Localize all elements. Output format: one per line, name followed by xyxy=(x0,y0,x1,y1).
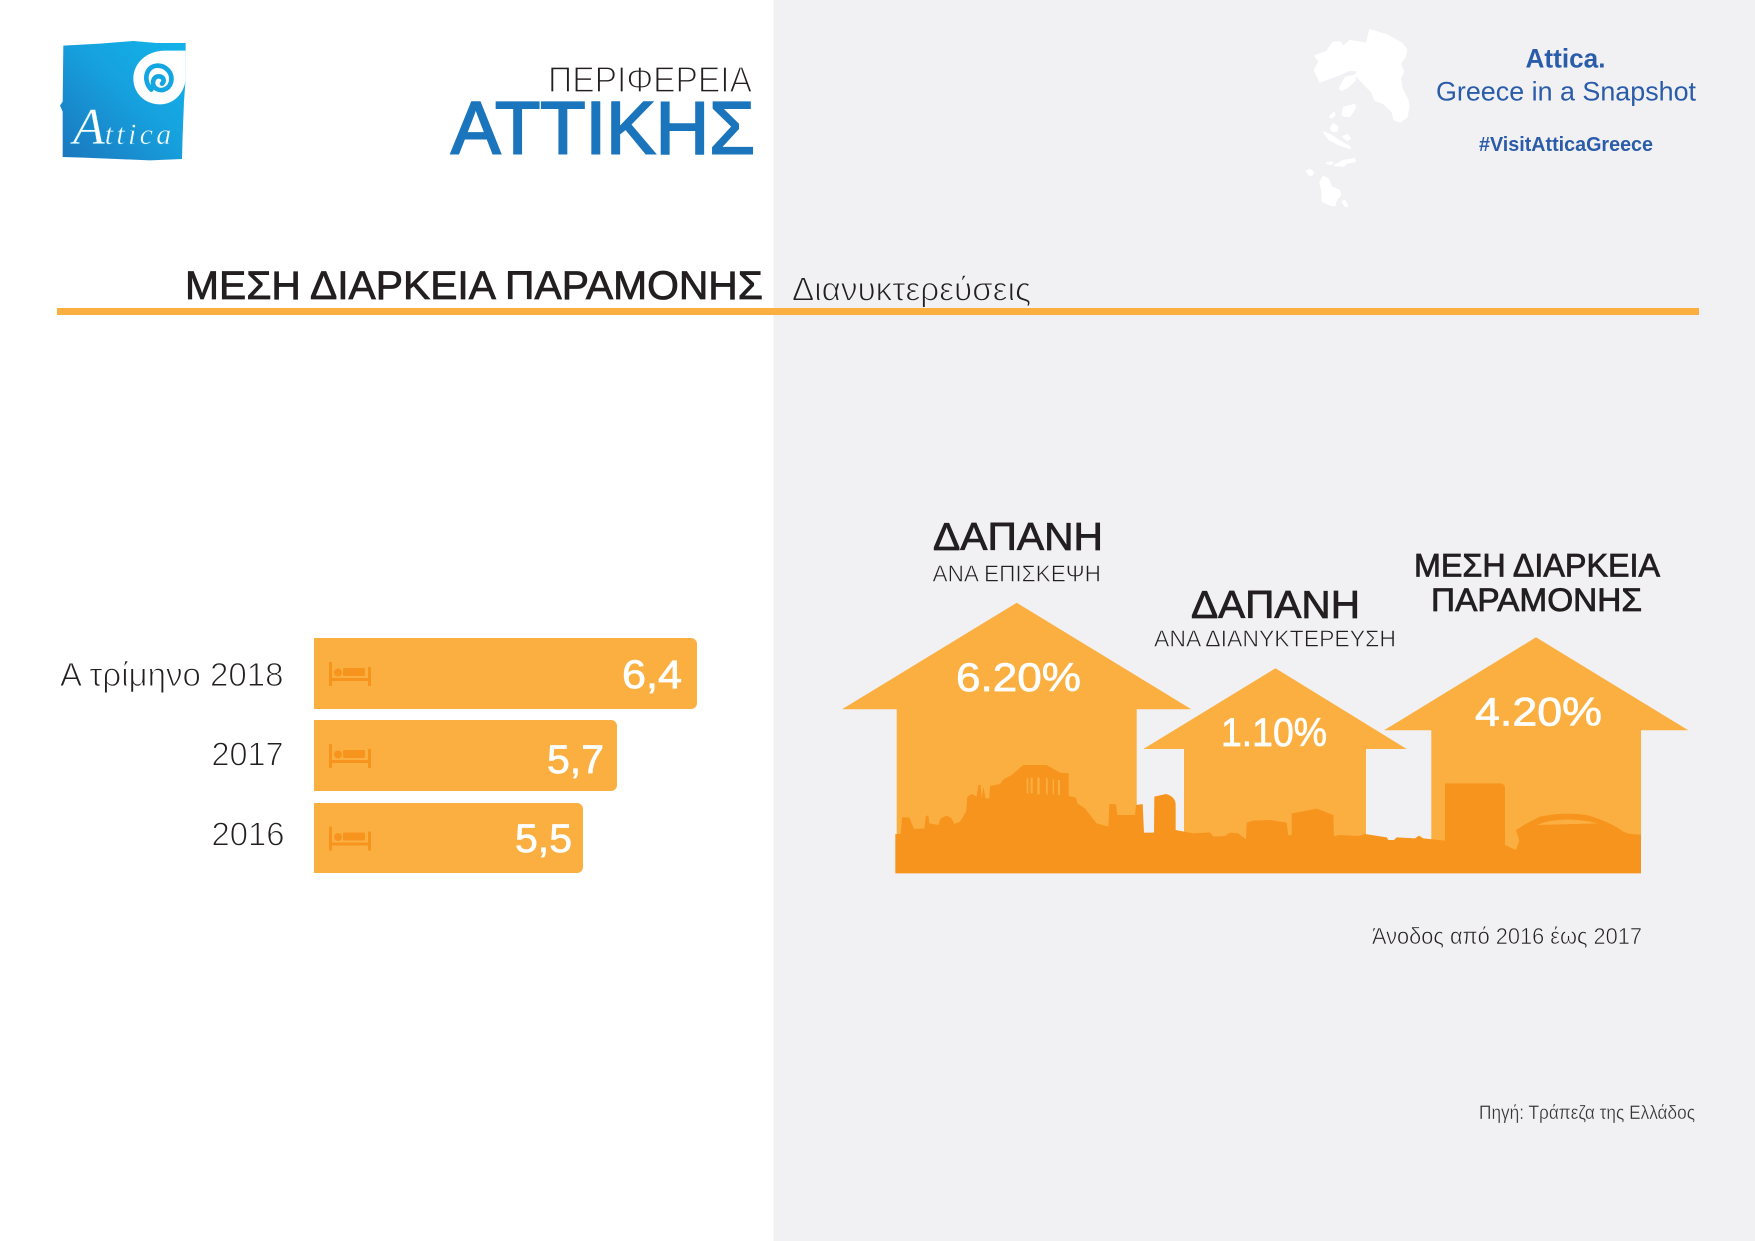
logo spiral xyxy=(133,51,186,104)
arrow: spend per visit xyxy=(842,603,1191,873)
icon: bed xyxy=(329,662,371,686)
section title: ΜΕΣΗ ΔΙΑΡΚΕΙΑ ΠΑΡΑΜΟΝΗΣ xyxy=(185,264,763,308)
label: spend per overnight stay: ΔΑΠΑΝΗ xyxy=(1191,584,1360,627)
label: average length of stay xyxy=(1414,548,1661,618)
bar: 2016 xyxy=(212,803,583,873)
value: 4.20%: 4.20% xyxy=(1475,690,1602,734)
note: period: Άνοδος από 2016 έως 2017 xyxy=(1372,923,1642,949)
arrow: spend per overnight stay xyxy=(1143,668,1407,873)
label: spend per overnight stay: ΑΝΑ ΔΙΑΝΥΚΤΕΡΕΥΣΗ xyxy=(1154,626,1396,652)
heading: region name: ΑΤΤΙΚΗΣ xyxy=(451,86,755,170)
text: Attica. Greece in a Snapshot xyxy=(1436,44,1696,156)
value: 6.20%: 6.20% xyxy=(956,656,1081,700)
label: average length of stay: ΠΑΡΑΜΟΝΗΣ xyxy=(1431,582,1642,618)
label: spend per visit xyxy=(932,516,1103,586)
bar chart: average stay xyxy=(60,638,697,873)
label: spend per visit: ΔΑΠΑΝΗ xyxy=(933,516,1103,559)
label: average length of stay: ΜΕΣΗ ΔΙΑΡΚΕΙΑ xyxy=(1414,548,1661,584)
heading: region name: ΠΕΡΙΦΕΡΕΙΑ xyxy=(548,59,752,100)
label: spend per overnight stay xyxy=(1154,584,1396,652)
label: spend per visit: ΑΝΑ ΕΠΙΣΚΕΨΗ xyxy=(932,560,1101,586)
bar: 2016: 2016 xyxy=(212,816,284,852)
chart: growth house arrows xyxy=(842,516,1688,873)
bar: 2017: 5,7 xyxy=(547,738,604,782)
text: Attica. Greece in a Snapshot: #VisitAtticaGreece xyxy=(1479,134,1653,156)
bar: first quarter 2018: Α τρίμηνο 2018 xyxy=(60,656,284,693)
section title xyxy=(185,264,1031,308)
icon: map of Attica xyxy=(1307,30,1409,206)
text: Attica. Greece in a Snapshot: Greece in a Snapshot xyxy=(1436,76,1696,106)
bar: first quarter 2018: 6,4 xyxy=(622,653,682,697)
source: Πηγή: Τράπεζα της Ελλάδος xyxy=(1479,1103,1695,1124)
icon: bed xyxy=(329,744,371,768)
text: Attica. Greece in a Snapshot: Attica. xyxy=(1526,44,1606,74)
skyline silhouette xyxy=(895,765,1641,873)
logo: Attica xyxy=(60,41,186,160)
section title: Διανυκτερεύσεις xyxy=(792,270,1031,308)
icon: bed xyxy=(329,826,371,850)
arrow: average length of stay xyxy=(1384,637,1688,873)
bar: 2017: 2017 xyxy=(212,736,284,772)
value: 1.10%: 1.10% xyxy=(1221,711,1327,755)
logo wordmark: Attica xyxy=(70,99,175,156)
bar: 2017 xyxy=(212,720,617,791)
bar: 2016: 5,5 xyxy=(515,817,572,861)
bar: first quarter 2018 xyxy=(60,638,697,709)
